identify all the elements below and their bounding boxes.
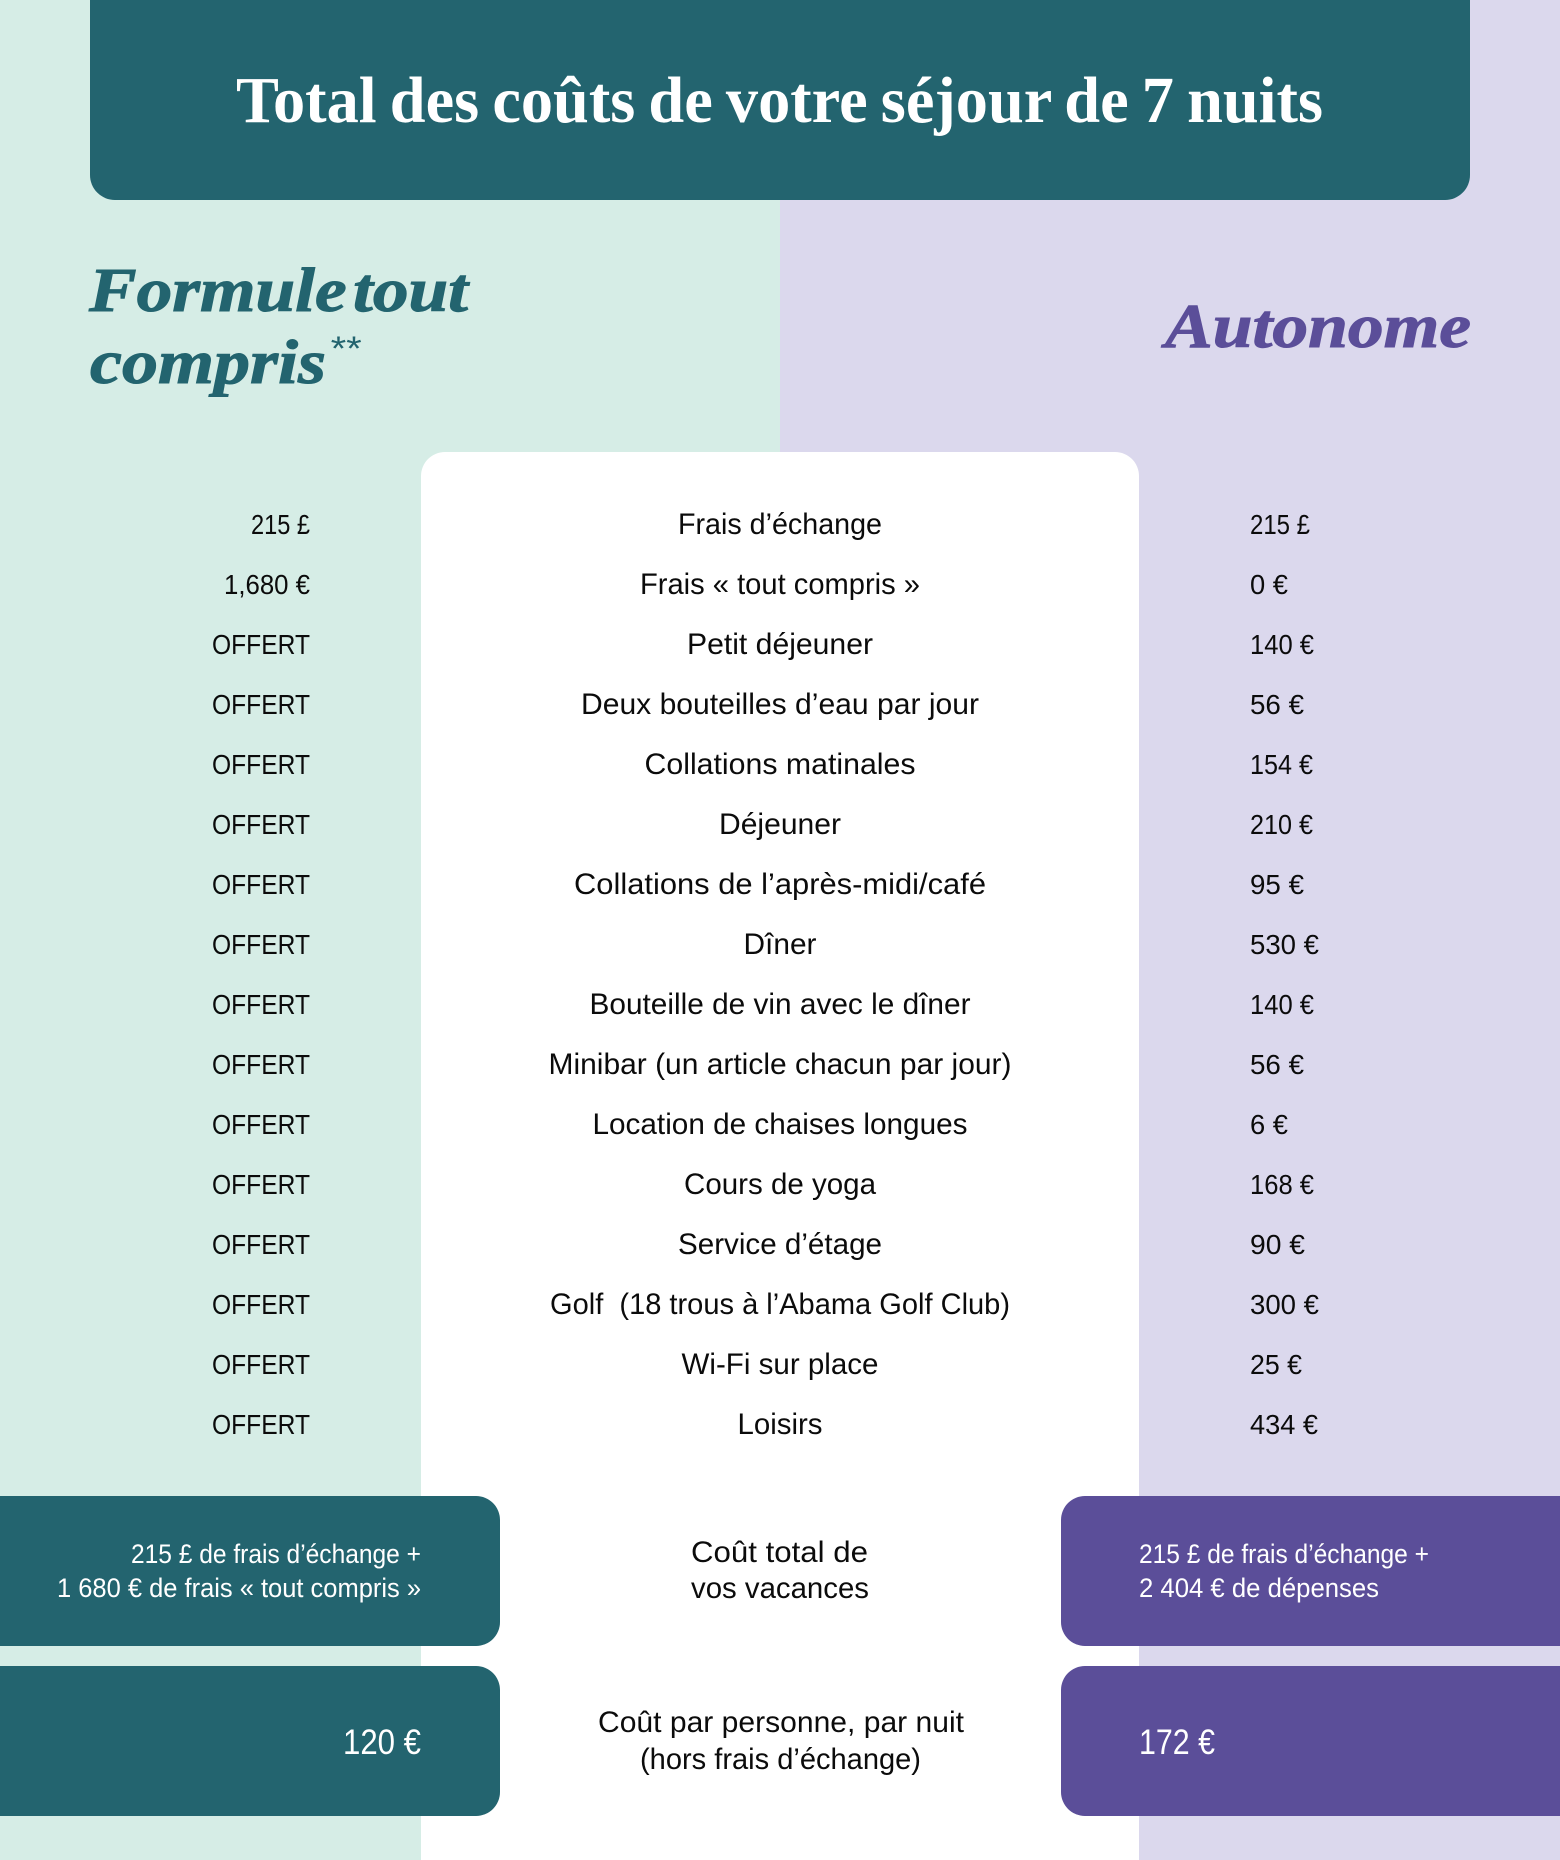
cost item labels: Frais « tout compris » — [640, 568, 920, 601]
left column values: OFFERT — [212, 1229, 310, 1260]
background: formule tout compris column — [0, 0, 780, 1860]
right total bar: 2 404 € de dépenses — [1139, 1573, 1379, 1603]
cost item labels: Petit déjeuner — [687, 628, 873, 661]
cost item labels: Wi-Fi sur place — [682, 1348, 878, 1381]
heading: formule tout compris: ** — [329, 330, 362, 368]
left column values: OFFERT — [212, 809, 310, 840]
heading: formule tout compris — [88, 257, 470, 397]
label: cost per person per night: Coût par personne, par nuit — [598, 1706, 965, 1739]
label: total cost — [691, 1536, 869, 1605]
right total bar: 215 £ de frais d’échange + — [1139, 1539, 1429, 1569]
label: cost per person per night — [598, 1706, 965, 1776]
heading: formule tout compris: Formule tout — [88, 257, 470, 325]
left column values: OFFERT — [212, 749, 310, 780]
left column values: OFFERT — [212, 1349, 310, 1380]
right column values: 210 € — [1250, 809, 1313, 840]
cost item labels: Collations de l’après-midi/café — [574, 868, 986, 901]
background: autonome column — [780, 0, 1560, 1860]
cost item labels: Frais d’échange — [678, 508, 882, 541]
right total bar — [1061, 1496, 1560, 1646]
cost item labels: Cours de yoga — [684, 1168, 876, 1201]
cost item labels — [548, 508, 1012, 1441]
heading: autonome: Autonome — [1160, 293, 1471, 361]
cost item labels: Bouteille de vin avec le dîner — [590, 988, 971, 1021]
left column values — [212, 509, 310, 1440]
left column values: OFFERT — [212, 689, 310, 720]
right column values: 25 € — [1250, 1349, 1302, 1380]
right per-person bar: 172 € — [1139, 1723, 1215, 1762]
panel: central white column — [421, 452, 1139, 1860]
title: Total des coûts de votre séjour de 7 nuits — [236, 64, 1323, 137]
right column values: 140 € — [1250, 989, 1314, 1020]
right column values: 90 € — [1250, 1229, 1305, 1260]
right column values: 6 € — [1250, 1109, 1288, 1140]
cost item labels: Deux bouteilles d’eau par jour — [581, 688, 979, 721]
left column values: 1,680 € — [224, 569, 310, 600]
cost item labels: Collations matinales — [644, 748, 916, 781]
right column values: 95 € — [1250, 869, 1304, 900]
cost item labels: Location de chaises longues — [592, 1108, 968, 1141]
heading: formule tout compris: compris — [90, 329, 326, 397]
right column values: 140 € — [1250, 629, 1314, 660]
right column values: 0 € — [1250, 569, 1288, 600]
left column values: 215 £ — [251, 509, 310, 540]
left total bar: 215 £ de frais d’échange + — [131, 1539, 421, 1569]
cost item labels: Loisirs — [738, 1408, 822, 1441]
left column values: OFFERT — [212, 629, 310, 660]
left column values: OFFERT — [212, 1049, 310, 1080]
left column values: OFFERT — [212, 1289, 310, 1320]
right per-person bar — [1061, 1666, 1560, 1816]
label: total cost: Coût total de — [691, 1536, 868, 1569]
right column values: 56 € — [1250, 1049, 1304, 1080]
title banner — [90, 0, 1470, 200]
left per-person bar: 120 € — [343, 1723, 421, 1762]
left per-person bar — [0, 1666, 500, 1816]
label: cost per person per night: (hors frais d’échange) — [640, 1743, 921, 1776]
cost item labels: Golf (18 trous à l’Abama Golf Club) — [550, 1288, 1010, 1321]
right column values: 530 € — [1250, 929, 1319, 960]
left column values: OFFERT — [212, 989, 310, 1020]
left column values: OFFERT — [212, 1409, 310, 1440]
left total bar — [0, 1496, 500, 1646]
label: total cost: vos vacances — [691, 1572, 869, 1605]
right column values: 154 € — [1250, 749, 1313, 780]
right column values: 56 € — [1250, 689, 1304, 720]
right column values: 215 £ — [1250, 509, 1310, 540]
right column values: 434 € — [1250, 1409, 1318, 1440]
cost item labels: Déjeuner — [719, 808, 841, 841]
cost item labels: Service d’étage — [678, 1228, 882, 1261]
left column values: OFFERT — [212, 1109, 310, 1140]
right column values — [1250, 509, 1319, 1440]
left column values: OFFERT — [212, 929, 310, 960]
left column values: OFFERT — [212, 1169, 310, 1200]
left column values: OFFERT — [212, 869, 310, 900]
right column values: 168 € — [1250, 1169, 1314, 1200]
left total bar: 1 680 € de frais « tout compris » — [57, 1573, 421, 1603]
cost item labels: Dîner — [744, 928, 817, 961]
cost item labels: Minibar (un article chacun par jour) — [548, 1048, 1012, 1081]
right column values: 300 € — [1250, 1289, 1319, 1320]
